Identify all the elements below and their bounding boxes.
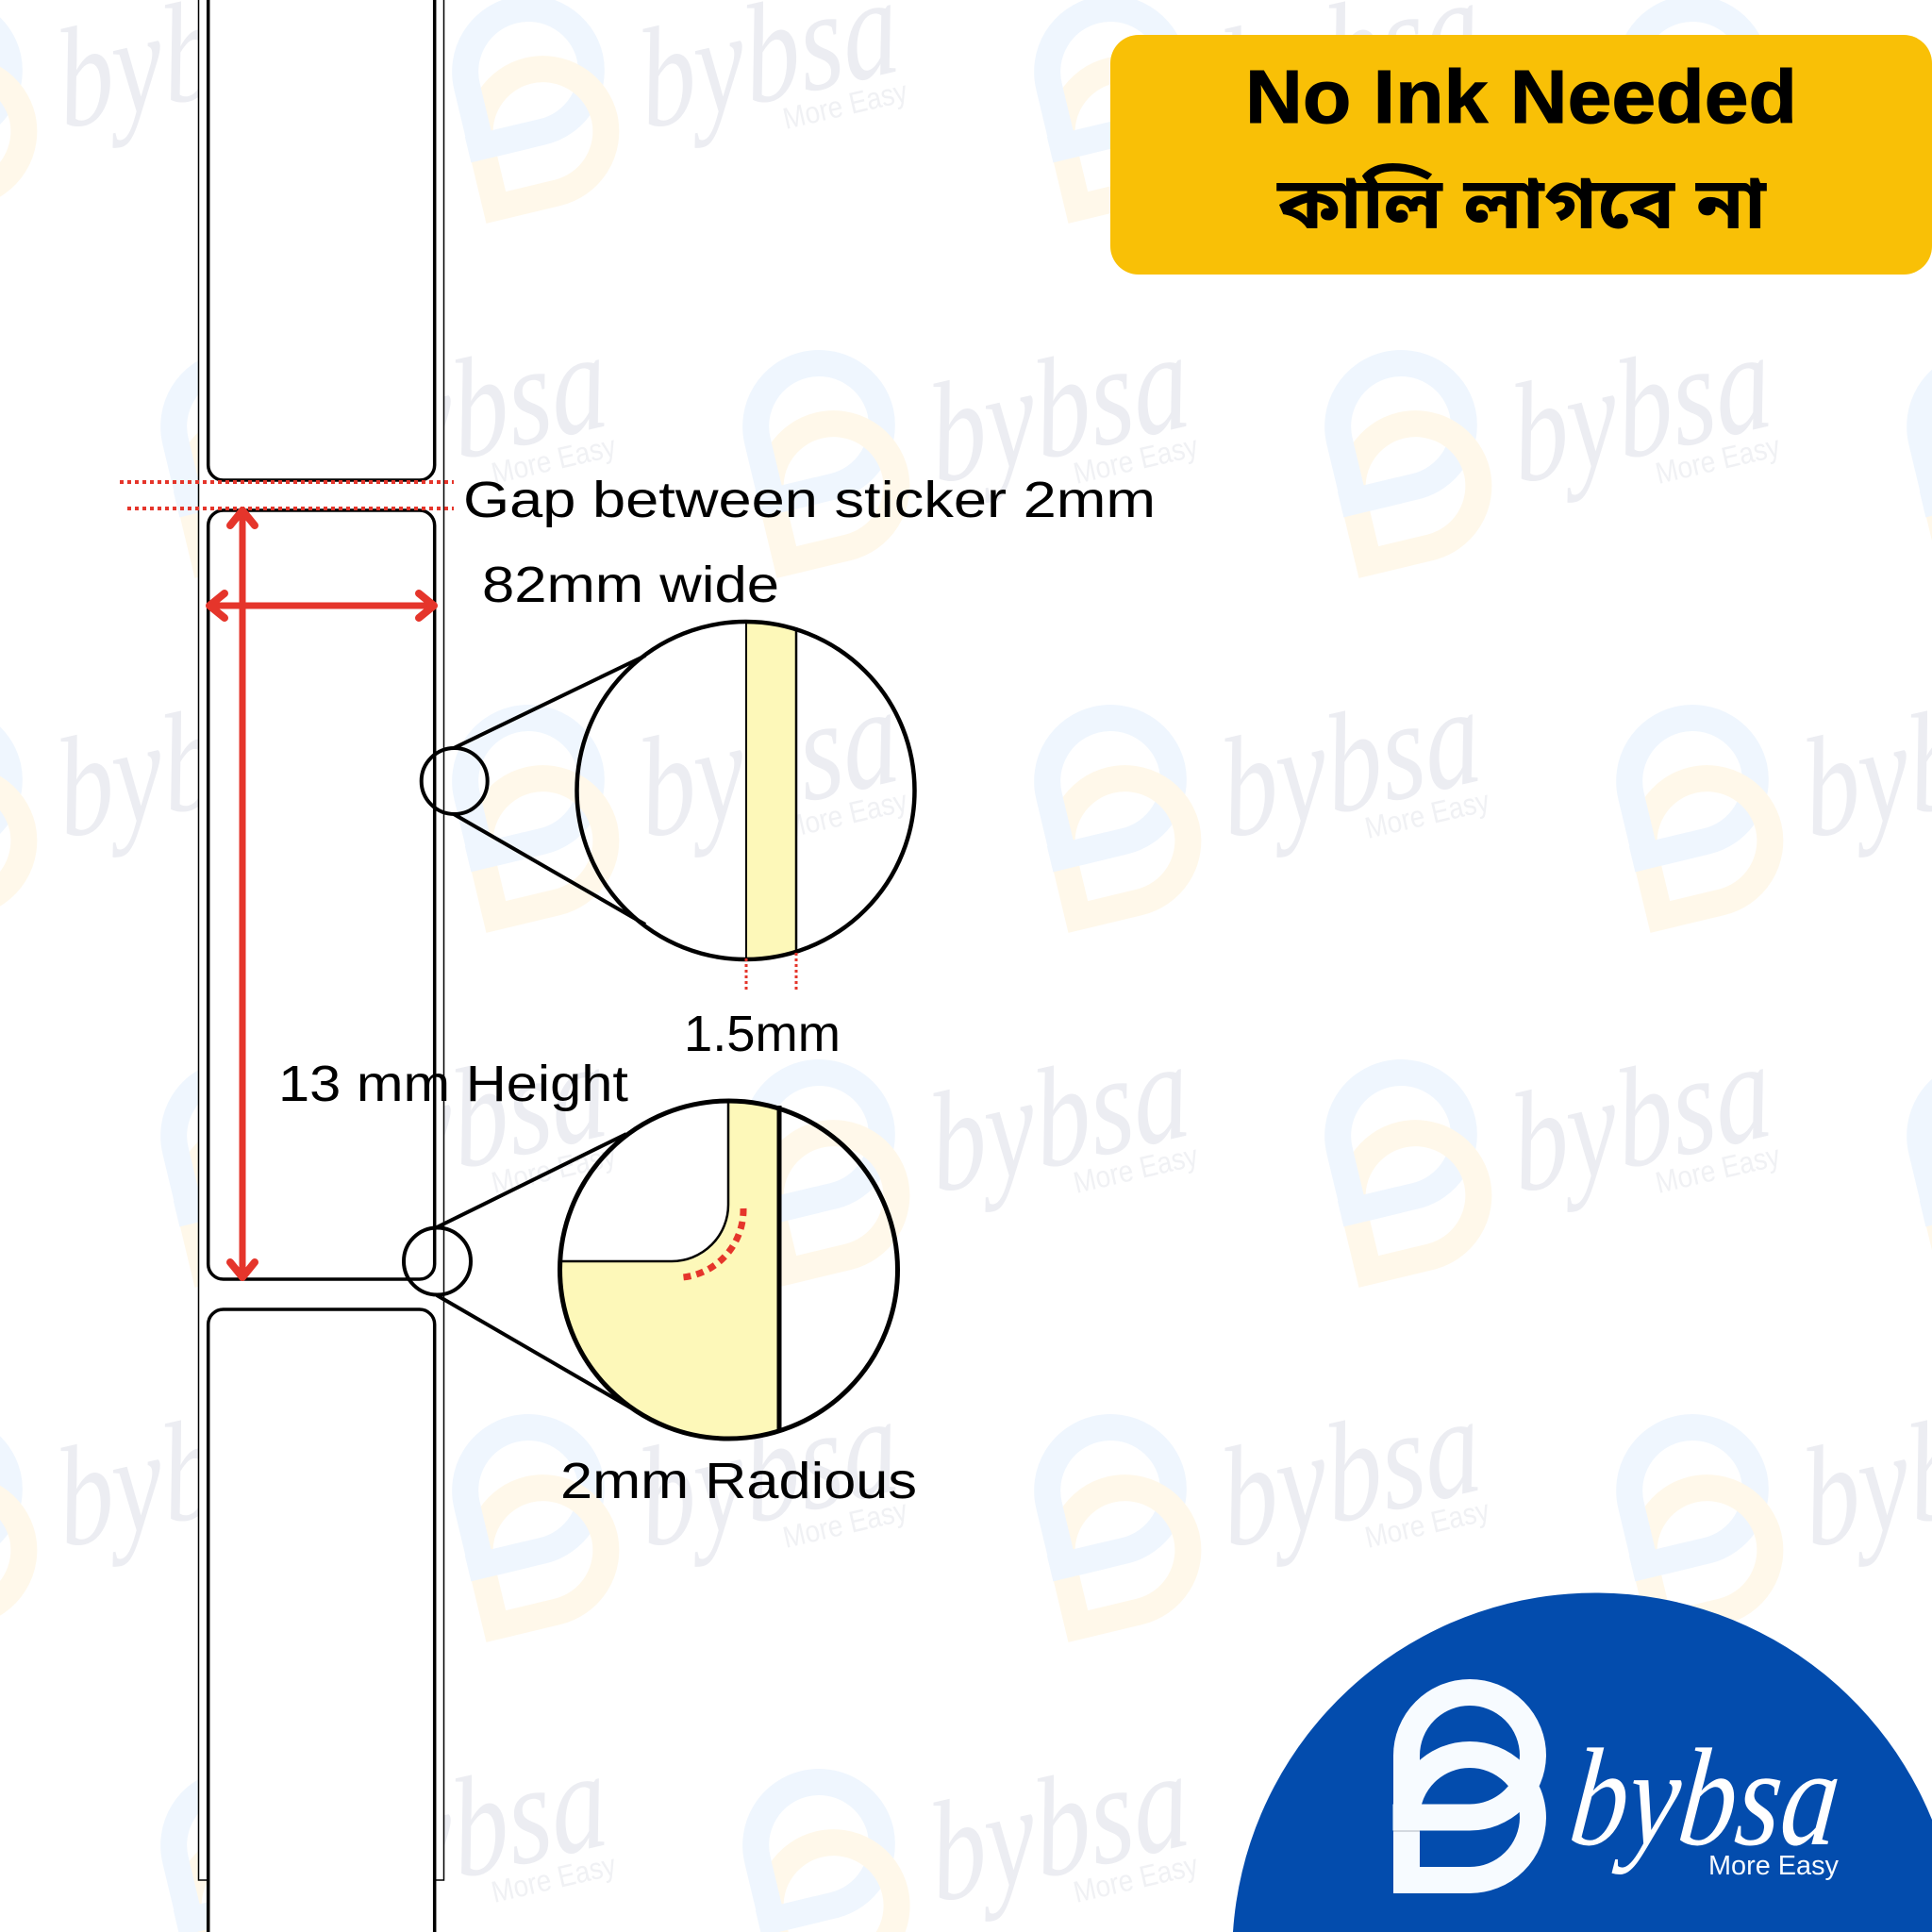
brand badge [1233, 1593, 1932, 1932]
watermark pattern: More Easy [1361, 784, 1492, 845]
watermark pattern: bybsa [339, 299, 615, 515]
watermark pattern: More Easy [197, 784, 328, 845]
sticker roll strip [198, 0, 443, 1932]
arrow: width [209, 593, 434, 618]
magnifier: edge margin [422, 613, 915, 992]
watermark pattern: More Easy [1070, 1848, 1201, 1909]
watermark pattern: More Easy [488, 1139, 619, 1200]
watermark pattern: More Easy [779, 75, 910, 136]
watermark pattern: bybsa [339, 1008, 615, 1224]
watermark pattern: More Easy [197, 75, 328, 136]
sticker: middle [208, 510, 435, 1279]
watermark pattern: More Easy [488, 429, 619, 491]
heading: english: No Ink Needed [1245, 55, 1797, 139]
gap guide lines [120, 482, 454, 508]
watermark pattern: More Easy [1652, 1139, 1783, 1200]
watermark pattern: bybsa [921, 1008, 1197, 1224]
label: radius: 2mm Radious [560, 1453, 917, 1509]
sticker: bottom [208, 1309, 435, 1932]
watermark pattern: More Easy [197, 1493, 328, 1555]
heading: bengali: কালি লাগবে না [1276, 163, 1768, 244]
watermark pattern: bybsa [921, 299, 1197, 515]
watermark pattern: More Easy [779, 784, 910, 845]
watermark pattern: bybsa [48, 1363, 325, 1579]
watermark pattern: More Easy [1070, 1139, 1201, 1200]
watermark pattern: More Easy [1652, 429, 1783, 491]
watermark pattern: bybsa [630, 654, 907, 870]
header badge [1110, 35, 1932, 275]
watermark pattern: bybsa [1503, 299, 1779, 515]
tagline: More Easy [1708, 1851, 1839, 1881]
sticker: top [208, 0, 435, 480]
watermark pattern: bybsa [339, 1718, 615, 1932]
watermark pattern: More Easy [1361, 1493, 1492, 1555]
watermark pattern: More Easy [1652, 1848, 1783, 1909]
watermark pattern: bybsa [1212, 654, 1489, 870]
watermark pattern: bybsa [1212, 1363, 1489, 1579]
watermark pattern: bybsa [630, 1363, 907, 1579]
label: width: 82mm wide [482, 557, 779, 613]
label: height: 13 mm Height [278, 1056, 628, 1112]
watermark pattern: bybsa [1503, 1008, 1779, 1224]
watermark pattern: More Easy [779, 1493, 910, 1555]
arrow: height [230, 510, 255, 1277]
icon: logo [1392, 1692, 1533, 1893]
watermark pattern: bybsa [1503, 1718, 1779, 1932]
label: gap: Gap between sticker 2mm [463, 472, 1156, 528]
brand name: bybsa [1564, 1721, 1848, 1875]
watermark pattern: More Easy [488, 1848, 619, 1909]
watermark pattern: More Easy [1070, 429, 1201, 491]
watermark pattern: More Easy [1361, 75, 1492, 136]
watermark pattern: bybsa [48, 654, 325, 870]
label: edge: 1.5mm [684, 1006, 841, 1062]
watermark pattern: bybsa [921, 1718, 1197, 1932]
magnifier: corner radius [404, 1085, 898, 1453]
